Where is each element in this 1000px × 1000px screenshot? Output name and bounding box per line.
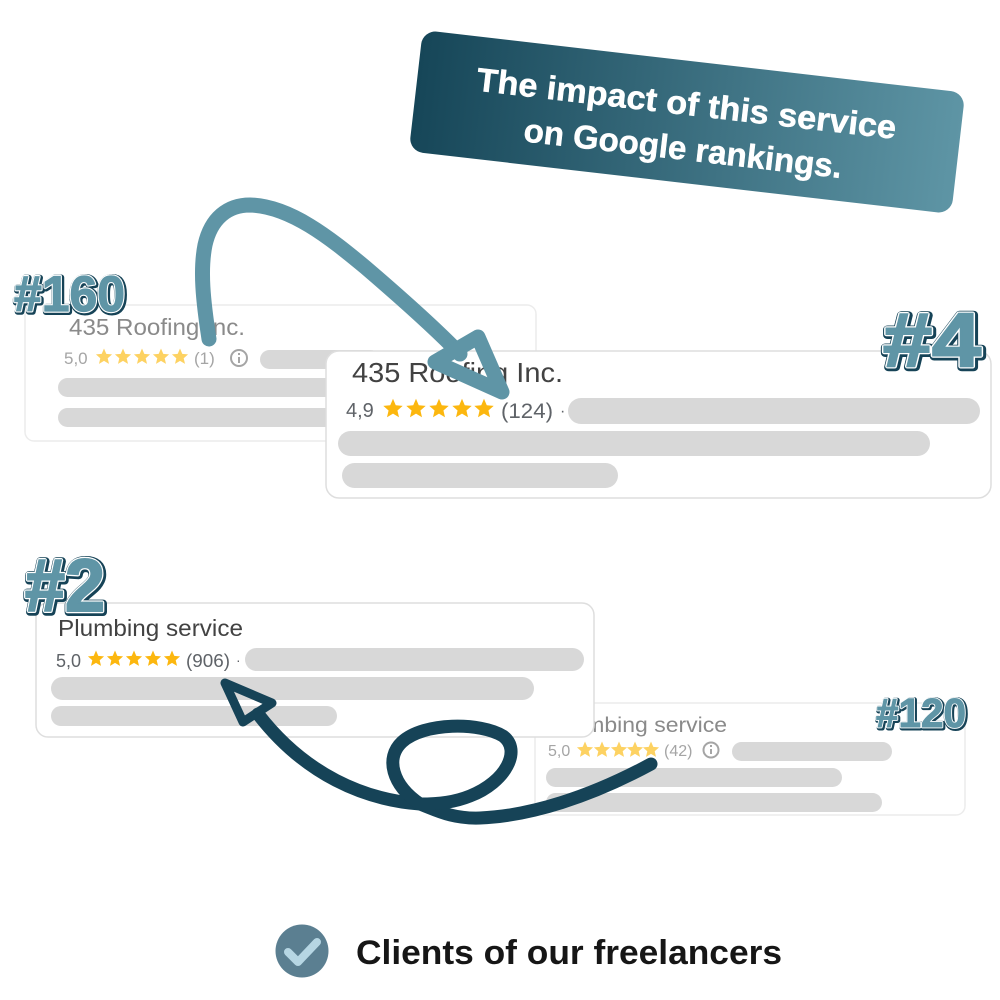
rating row: · <box>560 403 565 420</box>
title text: on Google rankings. <box>522 111 844 185</box>
panel: back card Plumbing service rank 120 <box>535 703 965 815</box>
rank label #160: #160 <box>14 266 125 322</box>
business name: 435 Roofing Inc. <box>69 314 245 340</box>
rating row <box>548 742 718 760</box>
title text: The impact of this service <box>475 61 898 146</box>
rating row: (1) <box>194 349 215 368</box>
rating row <box>56 650 241 671</box>
rank label #2: #2 <box>26 545 106 628</box>
banner: title <box>409 30 965 214</box>
arrow: teal curved arrow with head <box>202 205 502 392</box>
legend: check icon and caption <box>276 924 782 978</box>
arrow: dark looping arrow <box>225 683 651 818</box>
rating row <box>346 399 565 423</box>
rating row: (906) <box>186 651 230 671</box>
rank label #4: #4 <box>883 298 981 383</box>
rating row: 4,9 <box>346 400 374 422</box>
rank label #4: #4 <box>884 299 982 384</box>
caption: Clients of our freelancers <box>356 934 782 972</box>
rating row <box>64 348 247 368</box>
panel: front card 435 Roofing rank 4 <box>326 351 991 498</box>
rank label #120: #120 <box>876 690 966 736</box>
icon: check circle <box>276 924 328 978</box>
business name: Plumbing service <box>58 615 243 641</box>
placeholder bars <box>51 648 584 726</box>
rank label #160: #160 <box>15 267 126 323</box>
placeholder bars <box>58 350 398 427</box>
rank label #120: #120 <box>877 691 967 737</box>
rank label #2: #2 <box>25 544 105 627</box>
rank label #160: #160 <box>14 266 125 322</box>
panel: back card 435 Roofing rank 160 <box>25 305 536 441</box>
rank label #2: #2 <box>25 544 105 627</box>
rank label #4: #4 <box>883 298 981 383</box>
placeholder bars <box>338 398 980 488</box>
business name: Plumbing service <box>552 714 727 737</box>
rating row: (42) <box>664 743 692 760</box>
rank label #120: #120 <box>876 690 966 736</box>
placeholder bars <box>546 742 892 812</box>
rating row: (124) <box>501 400 553 423</box>
panel: front card Plumbing service rank 2 <box>36 603 594 737</box>
business name: 435 Roofing Inc. <box>352 357 563 388</box>
rating row: · <box>236 652 241 668</box>
rating row: 5,0 <box>64 349 88 368</box>
rating row: 5,0 <box>56 651 81 671</box>
rating row: 5,0 <box>548 743 570 760</box>
